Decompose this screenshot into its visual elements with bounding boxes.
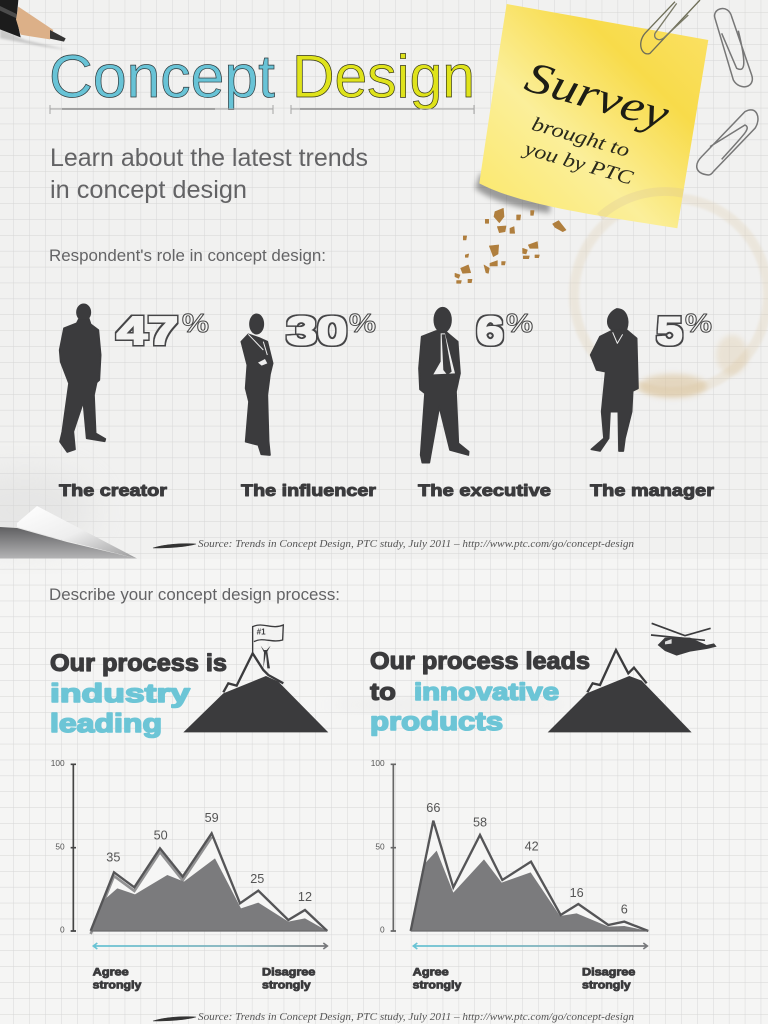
scale labels: strongly — [93, 980, 142, 992]
data values — [106, 811, 312, 904]
data values: 58 — [473, 815, 487, 829]
silhouette: the creator — [60, 304, 105, 452]
panel: roles — [59, 304, 714, 500]
heading: innovative products: products — [370, 706, 503, 736]
coffee ring stain — [574, 198, 768, 398]
title: Concept — [49, 43, 275, 110]
data values: 42 — [525, 840, 539, 854]
data values: 12 — [298, 890, 312, 904]
percent: 6: 6 — [476, 310, 504, 353]
axis labels: 0 — [60, 925, 65, 935]
axis labels: 100 — [371, 758, 385, 768]
source note 1: Source: Trends in Concept Design, PTC study, July 2011 – http://www.ptc.com/go/concept-design — [198, 539, 634, 550]
data values — [426, 801, 628, 916]
percent: 47 — [116, 308, 209, 353]
heading: industry leading: leading — [50, 708, 162, 738]
axis labels: 50 — [375, 841, 385, 851]
title — [49, 43, 475, 114]
scale labels: strongly — [582, 980, 632, 992]
section heading: role: Respondent's role in concept design: — [49, 246, 326, 265]
icon: mountain with flag: #1 — [257, 627, 266, 636]
percent: 30 — [286, 308, 376, 353]
data values: 59 — [205, 811, 219, 825]
axis labels — [51, 758, 65, 935]
label: the creator: The creator — [59, 481, 167, 500]
data values: 16 — [570, 886, 584, 900]
section heading: process: Describe your concept design process: — [49, 585, 340, 604]
scale labels: Disagree — [262, 967, 315, 979]
percent: 47: % — [182, 308, 209, 338]
agreement arrow — [413, 943, 647, 949]
axis labels — [371, 758, 385, 935]
chart: innovative products — [371, 758, 648, 992]
scale labels: strongly — [413, 980, 462, 992]
percent: 5: 5 — [656, 310, 682, 353]
heading: industry leading: industry — [50, 678, 191, 708]
silhouette: the executive — [419, 308, 469, 463]
heading: industry leading: Our process is — [50, 650, 227, 677]
subtitle — [50, 144, 368, 204]
label: the manager: The manager — [590, 481, 714, 500]
sticky note — [475, 4, 708, 228]
heading: industry leading — [50, 650, 227, 738]
survey handwriting: Survey — [520, 52, 675, 140]
icon: mountain with flag — [183, 625, 328, 732]
scale labels: Agree — [413, 967, 449, 979]
paper clips — [641, 0, 758, 175]
silhouette: the manager — [591, 309, 638, 451]
agreement arrow — [93, 943, 327, 949]
heading: innovative products — [370, 648, 590, 736]
percent: 30: % — [349, 308, 376, 338]
axis labels: 0 — [380, 925, 385, 935]
heading: innovative products: Our process leads — [370, 648, 590, 675]
percent: 6: % — [506, 308, 533, 338]
note byline — [520, 113, 636, 190]
scale labels: Disagree — [582, 967, 635, 979]
pencil — [0, 0, 68, 50]
heading: innovative products: innovative — [414, 679, 559, 706]
heading: innovative products: to — [370, 679, 396, 706]
axis labels: 50 — [55, 841, 65, 851]
percent: 5: % — [685, 308, 712, 338]
scale labels — [93, 967, 315, 992]
percent: 30: 30 — [286, 310, 348, 353]
page curl — [0, 506, 137, 558]
scale labels — [413, 967, 635, 992]
silhouette: the influencer — [241, 314, 273, 455]
axis labels: 100 — [51, 758, 65, 768]
data values: 6 — [621, 902, 628, 916]
chart: industry leading — [51, 758, 327, 992]
source note 2: Source: Trends in Concept Design, PTC study, July 2011 – http://www.ptc.com/go/concept-design — [198, 1012, 634, 1023]
title: Design — [292, 43, 475, 110]
note byline: brought to — [529, 113, 632, 162]
data values: 35 — [106, 851, 120, 865]
scale labels: Agree — [93, 967, 129, 979]
percent: 5 — [656, 308, 712, 353]
label: the executive: The executive — [418, 481, 551, 500]
percent: 47: 47 — [116, 310, 178, 353]
label: the influencer: The influencer — [241, 481, 376, 500]
scale labels: strongly — [262, 980, 312, 992]
crumbs — [455, 208, 566, 283]
data values: 66 — [426, 801, 440, 815]
note byline: you by PTC — [520, 137, 636, 190]
data values: 25 — [250, 872, 264, 886]
icon: mountain with helicopter — [548, 623, 717, 732]
percent: 6 — [476, 308, 533, 353]
subtitle: in concept design — [50, 176, 247, 204]
subtitle: Learn about the latest trends — [50, 144, 368, 172]
data values: 50 — [154, 828, 168, 842]
